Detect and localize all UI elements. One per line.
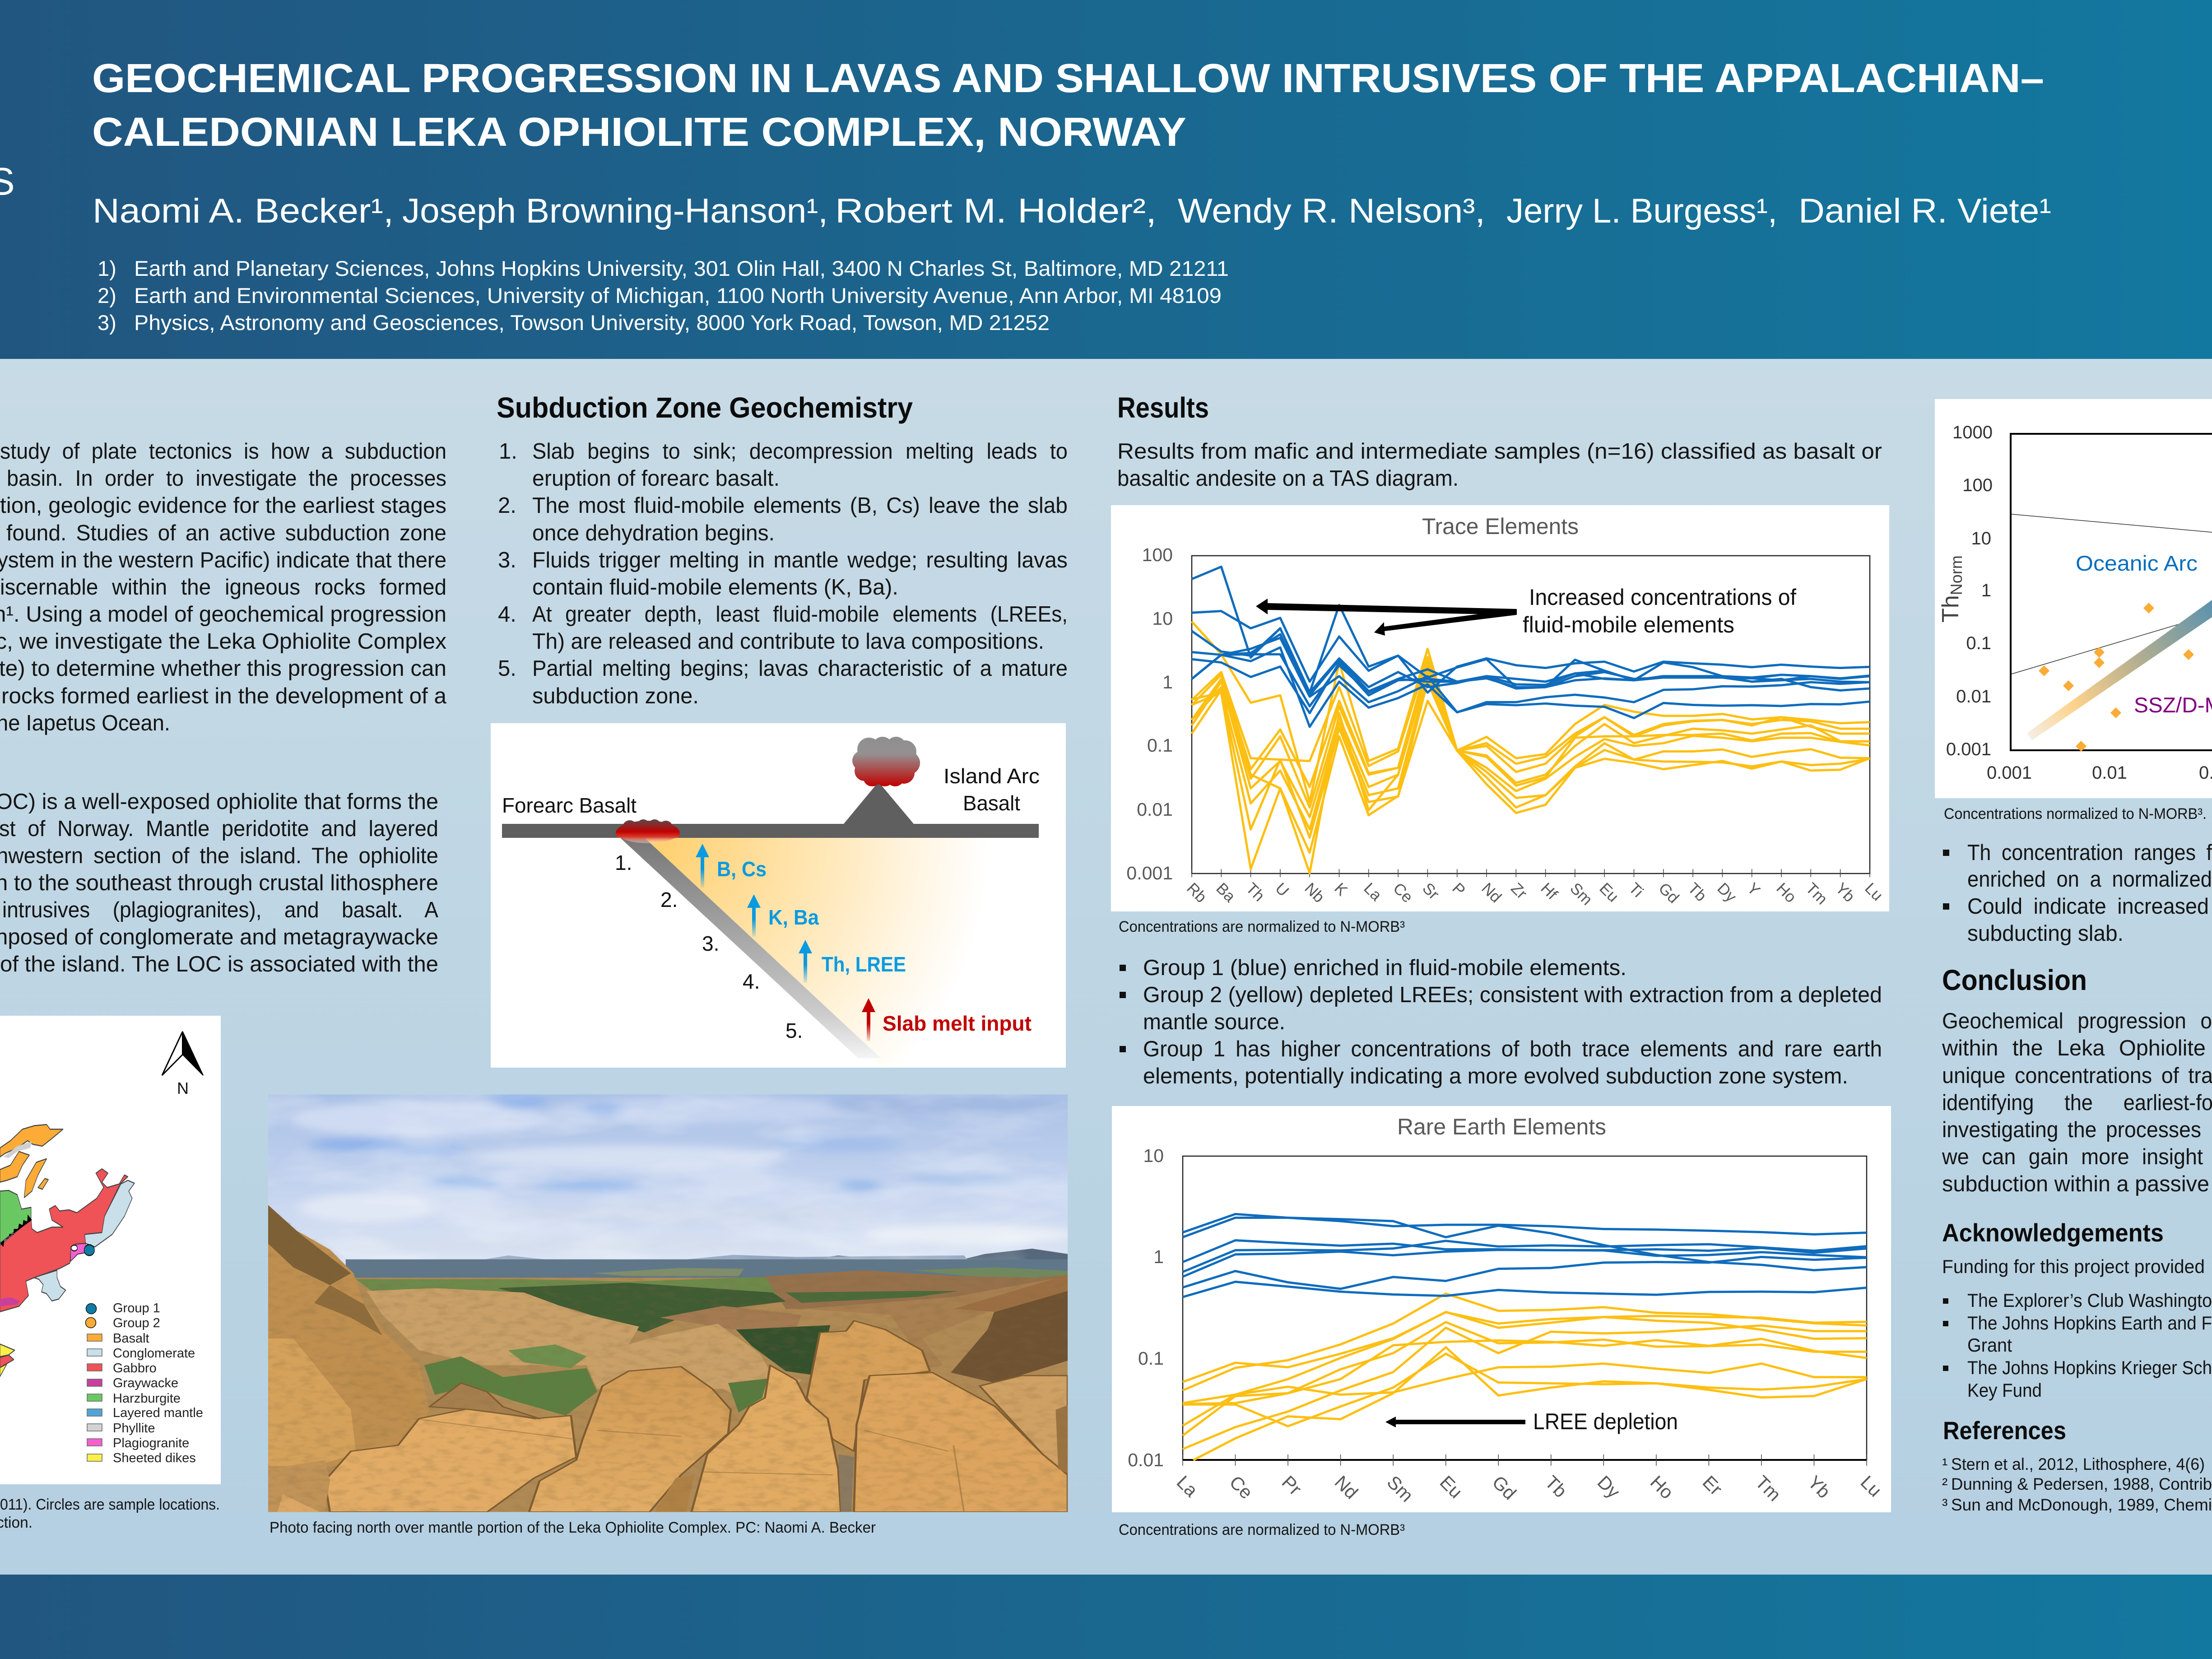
map legend: Phyllite	[113, 1421, 155, 1436]
text: geologic setting paragraph: nposed of conglomerate and metagraywacke	[0, 925, 438, 949]
y axis labels: 0.001	[1946, 739, 1991, 759]
affiliations	[98, 256, 1229, 335]
numbered list: subduction stages: Th) are released and contribute to lava compositions.	[532, 629, 1044, 654]
x axis element labels: Rb	[1183, 879, 1210, 906]
annotation: increased concentrations: Increased concentrations of	[1529, 585, 1796, 610]
y axis labels: 0.01	[1137, 799, 1173, 820]
y axis labels	[1946, 423, 1993, 759]
y axis labels: 1	[1981, 581, 1991, 600]
diagram labels: Forearc Basalt	[502, 794, 637, 817]
authors	[93, 192, 2051, 230]
text: results intro	[1117, 439, 1882, 491]
bullet list: results: mantle source.	[1143, 1010, 1285, 1034]
heading: Subduction Zone Geochemistry: Subduction Zone Geochemistry	[497, 391, 913, 424]
x axis labels	[1987, 763, 2212, 783]
heading: Results: Results	[1117, 391, 1209, 424]
numbered list: subduction stages: once dehydration begins.	[532, 521, 775, 545]
panel: rare earth elements chart	[1112, 1106, 1891, 1512]
y axis labels: 10	[1143, 1145, 1164, 1166]
data lines: group 1 and group 2	[1183, 1214, 1867, 1466]
x axis element labels: Th	[1242, 879, 1268, 905]
x axis element labels: U	[1272, 879, 1292, 900]
y axis labels	[1126, 544, 1173, 883]
x axis element labels: Ce	[1389, 879, 1417, 906]
text: results intro: Results from mafic and intermediate samples (n=16) classified as basalt or	[1117, 439, 1882, 464]
numbered list: subduction stages: Partial melting begins; lavas characteristic of a mature	[532, 656, 1068, 681]
arrow: Th, LREE	[799, 940, 906, 983]
map legend: Graywacke	[113, 1376, 178, 1390]
arrow: B, Cs: B, Cs	[717, 857, 767, 881]
numbered list: subduction stages: 4.	[498, 602, 516, 627]
y axis labels: 0.1	[1147, 735, 1173, 756]
field boundary lines	[2012, 514, 2212, 674]
foreground rocks	[325, 1321, 1068, 1512]
text: references: Stern et al., 2012, Lithosphere, 4(6)	[1951, 1455, 2205, 1473]
numbered list: subduction stages: 3.	[498, 548, 516, 572]
plot frame	[2011, 434, 2212, 750]
text: geologic setting paragraph: n to the southeast through crustal lithosphere	[0, 871, 438, 895]
y axis labels: 1000	[1952, 423, 1993, 442]
authors: Wendy R. Nelson³,	[1178, 192, 1485, 230]
text: acknowledgements: Funding for this project provided	[1942, 1256, 2205, 1277]
x axis element labels: Tm	[1802, 879, 1831, 908]
title: CALEDONIAN LEKA OPHIOLITE COMPLEX, NORWAY	[92, 110, 1186, 155]
x axis element labels	[1183, 879, 1886, 909]
caption: trace elements: Concentrations are normalized to N-MORB³	[1119, 918, 1405, 935]
y axis labels: 10	[1152, 608, 1173, 629]
map legend: Group 1	[113, 1301, 160, 1315]
text: results intro: basaltic andesite on a TAS diagram.	[1117, 466, 1459, 491]
text: references	[1942, 1455, 2212, 1514]
numbered list: subduction stages: subduction zone.	[532, 684, 699, 708]
dark right outcrop	[951, 1291, 1068, 1383]
sample diamonds	[2039, 603, 2194, 752]
x axis element labels: Tm	[1752, 1472, 1785, 1505]
trend band	[2027, 600, 2212, 740]
map polygons	[0, 1125, 135, 1376]
map legend: Gabbro	[113, 1361, 157, 1376]
text: acknowledgements	[1942, 1256, 2212, 1401]
map legend: Harzburgite	[113, 1391, 181, 1406]
left cliff	[268, 1205, 429, 1469]
text: conclusion: we can gain more insight	[1942, 1145, 2203, 1169]
text: introduction paragraph: te) to determine whether this progression can	[0, 656, 446, 681]
x axis element labels: Dy	[1714, 879, 1740, 906]
text: conclusion: subduction within a passive	[1942, 1172, 2209, 1196]
bullet list: results: Group 1 (blue) enriched in fluid-mobile elements.	[1143, 956, 1626, 980]
diagram labels: Island Arc	[943, 764, 1040, 788]
caption: rare earth elements: Concentrations are normalized to N-MORB³	[1119, 1521, 1405, 1538]
x axis element labels: Sr	[1419, 879, 1443, 903]
x axis element labels: Sm	[1383, 1472, 1417, 1506]
diagram labels: Basalt	[963, 791, 1020, 815]
chart title: Trace Elements	[1422, 514, 1579, 539]
sea	[346, 1259, 1068, 1282]
y axis labels: 0.1	[1138, 1348, 1164, 1369]
diagram labels: 3.	[702, 932, 719, 955]
numbered list: subduction stages: The most fluid-mobile elements (B, Cs) leave the slab	[532, 493, 1068, 518]
data lines: group 1 and group 2	[1192, 567, 1870, 877]
affiliations: Earth and Environmental Sciences, University of Michigan, 1100 North University Avenue, Ann Arbor, MI 48109	[134, 283, 1222, 307]
text: references: ¹	[1942, 1455, 1947, 1473]
x axis element labels: Gd	[1488, 1472, 1520, 1504]
heading: Conclusion: Conclusion	[1942, 964, 2087, 996]
north arrow	[162, 1032, 203, 1097]
text: introduction paragraph: he Iapetus Ocean.	[0, 711, 170, 735]
authors: Robert M. Holder²,	[835, 192, 1157, 230]
bullet list: results: Group 2 (yellow) depleted LREEs; consistent with extraction from a depleted	[1143, 983, 1882, 1007]
text: geologic setting paragraph: OC) is a well-exposed ophiolite that forms the	[0, 790, 438, 814]
text: introduction paragraph: found. Studies of an active subduction zone	[6, 521, 446, 545]
affiliations: Earth and Planetary Sciences, Johns Hopkins University, 301 Olin Hall, 3400 N Charles St, Baltimore, MD 21211	[134, 256, 1229, 280]
y axis labels: 100	[1142, 544, 1173, 565]
forearc basalt eruption	[616, 819, 680, 843]
authors: Joseph Browning-Hanson¹,	[402, 192, 828, 230]
y axis labels	[1128, 1145, 1164, 1470]
panel: Th vs Nb discrimination chart	[1935, 399, 2212, 798]
text: references: Dunning & Pedersen, 1988, Contrib	[1951, 1475, 2212, 1493]
y axis title: Norm	[1947, 555, 1966, 595]
distant mountains	[948, 1249, 1068, 1269]
map legend: Group 2	[113, 1316, 160, 1330]
north arrow: N	[177, 1079, 189, 1097]
diagram labels	[502, 764, 1040, 1042]
x axis element labels: Ba	[1213, 879, 1239, 906]
text: introduction paragraph: ystem in the western Pacific) indicate that there	[0, 548, 446, 572]
map legend: Layered mantle	[113, 1406, 203, 1420]
title: GEOCHEMICAL PROGRESSION IN LAVAS AND SHALLOW INTRUSIVES OF THE APPALACHIAN–	[92, 56, 2044, 101]
x axis element labels: La	[1173, 1472, 1202, 1501]
arrow: K, Ba: K, Ba	[768, 906, 819, 929]
mantle wedge glow	[645, 838, 1039, 1068]
affiliations: 3)	[98, 311, 116, 335]
authors: Jerry L. Burgess¹,	[1506, 192, 1777, 230]
x axis element labels: Nb	[1301, 879, 1328, 906]
heading: Acknowledgements: Acknowledgements	[1942, 1218, 2164, 1247]
x axis element labels: Lu	[1857, 1472, 1886, 1501]
map legend	[86, 1301, 203, 1465]
text: geologic setting paragraph: intrusives (plagiogranites), and basalt. A	[2, 898, 438, 922]
affiliations: 1)	[98, 256, 116, 280]
text: introduction paragraph: n¹. Using a model of geochemical progression	[0, 602, 446, 627]
authors: Daniel R. Viete¹	[1798, 192, 2051, 230]
numbered list: subduction stages: 1.	[499, 439, 517, 464]
numbered list: subduction stages: 2.	[498, 493, 516, 518]
text: conclusion: investigating the processes	[1942, 1118, 2201, 1142]
x axis element labels: Yb	[1832, 879, 1858, 906]
midground land	[268, 1278, 1068, 1515]
numbered list: subduction stages: Fluids trigger melting in mantle wedge; resulting lavas	[532, 548, 1068, 572]
photo caption: Photo facing north over mantle portion of the Leka Ophiolite Complex. PC: Naomi A. Becker	[270, 1519, 876, 1536]
diagram labels: 4.	[743, 970, 760, 993]
field label: Oceanic Arc: Oceanic Arc	[2076, 551, 2198, 575]
x axis element labels: Tb	[1684, 879, 1710, 905]
affiliations: 2)	[98, 283, 116, 307]
y axis labels: 1	[1162, 672, 1173, 692]
footer band	[0, 1575, 2212, 1659]
x axis element labels: Ho	[1773, 879, 1800, 906]
photo: Leka mantle landscape	[268, 1092, 1074, 1515]
cloud texture	[268, 1094, 1068, 1261]
bullet list: results	[1120, 956, 1882, 1088]
y axis title: Th	[1938, 595, 1964, 623]
rock texture	[268, 1205, 1068, 1512]
x axis element labels: Zr	[1507, 879, 1531, 902]
numbered list: subduction stages: Slab begins to sink; decompression melting leads to	[532, 439, 1068, 464]
y axis labels: 10	[1971, 529, 1991, 548]
map caption	[0, 1496, 220, 1531]
text: introduction paragraph: iscernable within the igneous rocks formed	[0, 575, 446, 599]
y axis labels: 0.1	[1966, 633, 1991, 653]
text: acknowledgements: Key Fund	[1967, 1380, 2042, 1401]
x axis element labels	[1173, 1472, 1886, 1506]
numbered list: subduction stages: 5.	[498, 656, 516, 681]
x axis labels: 0.01	[2092, 763, 2127, 783]
x axis labels: 0.001	[1987, 763, 2032, 783]
text: geologic setting paragraph: nwestern section of the island. The ophiolite	[0, 844, 438, 868]
numbered list: subduction stages: eruption of forearc basalt.	[532, 466, 780, 491]
chart title: Rare Earth Elements	[1397, 1114, 1606, 1139]
annotation: increased concentrations	[1523, 585, 1796, 637]
numbered list: subduction stages: At greater depth, least fluid-mobile elements (LREEs,	[532, 602, 1068, 627]
x axis element labels: Nd	[1478, 879, 1505, 906]
text: references: ³	[1942, 1496, 1947, 1514]
arrow: K, Ba	[747, 894, 819, 937]
bullet list: results: Group 1 has higher concentrations of both trace elements and rare earth	[1143, 1037, 1882, 1061]
text: geologic setting paragraph: of the island. The LOC is associated with the	[0, 952, 438, 976]
x axis element labels: Eu	[1596, 879, 1622, 906]
diagram labels: 2.	[660, 888, 678, 911]
text: acknowledgements: Grant	[1967, 1334, 2012, 1356]
arrow: slab melt input: Slab melt input	[883, 1012, 1032, 1035]
x axis element labels: Gd	[1655, 879, 1682, 907]
map legend: Basalt	[113, 1331, 149, 1346]
subducting slab	[620, 838, 881, 1058]
diagram labels: 5.	[785, 1019, 803, 1042]
x axis element labels: Nd	[1331, 1472, 1362, 1503]
diagram labels: 1.	[615, 851, 632, 874]
map caption: 011). Circles are sample locations.	[0, 1496, 220, 1513]
eruption plume	[852, 737, 920, 786]
text: introduction paragraph: basin. In order to investigate the processes	[7, 466, 446, 491]
annotation: LREE depletion arrow: LREE depletion	[1533, 1409, 1678, 1434]
panel: subduction diagram	[491, 723, 1066, 1068]
x axis element labels: Y	[1743, 879, 1763, 899]
x axis element labels: K	[1331, 879, 1351, 899]
heading: References: References	[1943, 1416, 2066, 1445]
plot frame	[1192, 556, 1870, 874]
x axis element labels: Lu	[1861, 879, 1886, 904]
x axis element labels: Ce	[1226, 1472, 1257, 1503]
x axis element labels: Er	[1699, 1472, 1726, 1499]
affiliations: Physics, Astronomy and Geosciences, Towson University, 8000 York Road, Towson, MD 21252	[134, 311, 1050, 335]
text: geologic setting paragraph	[0, 790, 438, 976]
text: introduction paragraph: c, we investigate the Leka Ophiolite Complex	[0, 629, 446, 654]
x axis element labels: Ti	[1625, 879, 1647, 901]
text: conclusion	[1942, 1009, 2212, 1196]
x axis element labels: Hf	[1537, 879, 1561, 903]
panel: trace elements chart	[1111, 505, 1889, 911]
annotation: LREE depletion arrow	[1385, 1409, 1678, 1434]
y axis labels: 0.001	[1126, 863, 1173, 883]
x axis element labels: Dy	[1594, 1472, 1624, 1502]
authors: Naomi A. Becker¹,	[93, 192, 394, 230]
caption: Th chart: Concentrations normalized to N-MORB³.	[1944, 805, 2207, 823]
panel: geologic map	[0, 1016, 221, 1484]
x axis element labels: P	[1449, 879, 1468, 899]
x axis element labels: Eu	[1436, 1472, 1467, 1502]
x axis element labels: Pr	[1278, 1472, 1306, 1499]
arrow: slab melt input	[862, 998, 1032, 1041]
bullet list: thorium: subducting slab.	[1967, 921, 2124, 946]
plot frame	[1183, 1156, 1867, 1460]
map legend: Sheeted dikes	[113, 1451, 196, 1465]
text: geologic setting paragraph: st of Norway. Mantle peridotite and layered	[0, 817, 438, 841]
text: conclusion: within the Leka Ophiolite	[1942, 1036, 2206, 1060]
y axis labels: 0.01	[1956, 687, 1991, 706]
x axis element labels: La	[1360, 879, 1385, 905]
annotation: increased concentrations: fluid-mobile elements	[1523, 612, 1734, 637]
map legend: Conglomerate	[113, 1346, 195, 1361]
map legend: Plagiogranite	[113, 1436, 189, 1450]
text: introduction paragraph	[0, 439, 447, 735]
text: references: Sun and McDonough, 1989, Chemi	[1951, 1496, 2212, 1514]
volcano	[844, 782, 914, 824]
title	[92, 56, 2044, 155]
numbered list: subduction stages: contain fluid-mobile elements (K, Ba).	[532, 575, 898, 599]
text: introduction paragraph: study of plate tectonics is how a subduction	[0, 439, 446, 464]
text: introduction paragraph: rocks formed earliest in the development of a	[1, 684, 447, 708]
y axis labels: 0.01	[1128, 1450, 1164, 1470]
x axis element labels: Ho	[1646, 1472, 1678, 1503]
text: references: ²	[1942, 1475, 1947, 1493]
bullet list: results: elements, potentially indicating a more evolved subduction zone system.	[1143, 1064, 1848, 1088]
bullet list: thorium	[1943, 841, 2212, 946]
x axis element labels: Tb	[1541, 1472, 1571, 1501]
text: introduction paragraph: tion, geologic evidence for the earliest stages	[0, 493, 446, 518]
arrow: Th, LREE: Th, LREE	[822, 953, 906, 976]
y axis labels: 1	[1153, 1246, 1164, 1267]
x axis element labels: Sm	[1566, 879, 1596, 909]
y axis labels: 100	[1962, 475, 1993, 495]
numbered list: subduction stages	[498, 439, 1068, 708]
lithosphere bar	[502, 824, 1039, 838]
header band	[0, 0, 2212, 359]
annotation arrows: fluid-mobile elements	[1256, 599, 1517, 636]
x axis element labels: Yb	[1804, 1472, 1835, 1502]
arrow: B, Cs	[696, 844, 767, 888]
